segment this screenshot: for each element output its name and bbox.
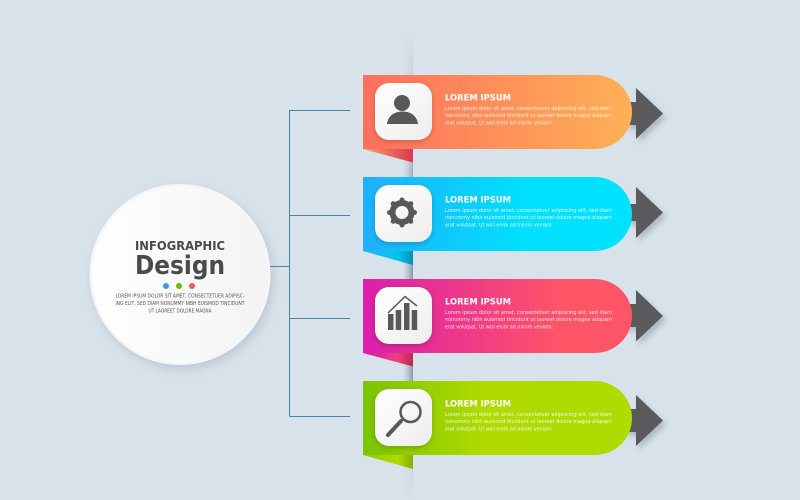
panel: banner 3 [363, 279, 663, 366]
banner text 2: erat volutpat. Ut wisi enim ad minim veniam. [445, 222, 553, 228]
arrow 3 [625, 290, 663, 342]
banner title 3: LOREM IPSUM [445, 298, 511, 308]
banner text 4: nonummy nibh euismod tincidunt ut laoreet dolore magna aliquam [445, 419, 612, 425]
banner body 3 [363, 279, 632, 353]
banner title 4: LOREM IPSUM [445, 400, 511, 410]
panel: central circle [90, 184, 270, 365]
icon tile: person [375, 83, 432, 140]
banner text 4 [445, 412, 612, 432]
banner text 3 [445, 310, 612, 330]
banner text 4: erat volutpat. Ut wisi enim ad minim veniam. [445, 426, 553, 432]
heading: infographic: INFOGRAPHIC [135, 238, 225, 253]
banner text 2: Lorem ipsum dolor sit amet, consectetuer adipiscing elit, sed diam [445, 208, 612, 214]
connector lines [270, 110, 350, 416]
vertical centre fold [404, 52, 413, 480]
icon tile: magnifier [375, 389, 432, 446]
arrow 4 [625, 395, 663, 446]
text block: circle description: UT LAOREET DOLORE MAGNA [148, 308, 212, 314]
banner text 3: Lorem ipsum dolor sit amet, consectetuer adipiscing elit, sed diam [445, 310, 612, 316]
dots [163, 283, 195, 289]
banner text 3: nonummy nibh euismod tincidunt ut laoreet dolore magna aliquam [445, 317, 612, 323]
banner text 1 [445, 106, 612, 126]
banner text 2: nonummy nibh euismod tincidunt ut laoreet dolore magna aliquam [445, 215, 612, 221]
banner text 1: erat volutpat. Ut wisi enim ad minim veniam. [445, 120, 553, 126]
banner title 2: LOREM IPSUM [445, 196, 511, 206]
ribbon tail 1 [363, 149, 413, 162]
banner body 2 [363, 177, 632, 251]
banner text 1: nonummy nibh euismod tincidunt ut laoreet dolore magna aliquam [445, 113, 612, 119]
text block: circle description [116, 294, 245, 314]
ribbon tail 3 [363, 353, 413, 366]
heading: design: Design [135, 251, 225, 281]
text block: circle description: ING ELIT, SED DIAM NONUMMY NIBH EUISMOD TINCIDUNT [116, 301, 245, 307]
banner text 4: Lorem ipsum dolor sit amet, consectetuer adipiscing elit, sed diam [445, 412, 612, 418]
icon tile: bar chart [375, 287, 432, 344]
ribbon tail 4 [363, 455, 413, 469]
banner title 1: LOREM IPSUM [445, 94, 511, 104]
text block: circle description: LOREM IPSUM DOLOR SIT AMET, CONSECTETUER ADIPISC- [116, 294, 245, 300]
ribbon tail 2 [363, 251, 413, 265]
banner text 1: Lorem ipsum dolor sit amet, consectetuer adipiscing elit, sed diam [445, 106, 612, 112]
icon tile: gear [375, 185, 432, 242]
arrow 1 [625, 88, 663, 139]
panel: banner 1 [363, 75, 663, 162]
arrow 2 [625, 187, 663, 238]
banner body 1 [363, 75, 632, 149]
panel: banner 2 [363, 177, 663, 265]
banner body 4 [363, 381, 632, 455]
banner text 2 [445, 208, 612, 228]
banner text 3: erat volutpat. Ut wisi enim ad minim veniam. [445, 324, 553, 330]
panel: banner 4 [363, 381, 663, 469]
